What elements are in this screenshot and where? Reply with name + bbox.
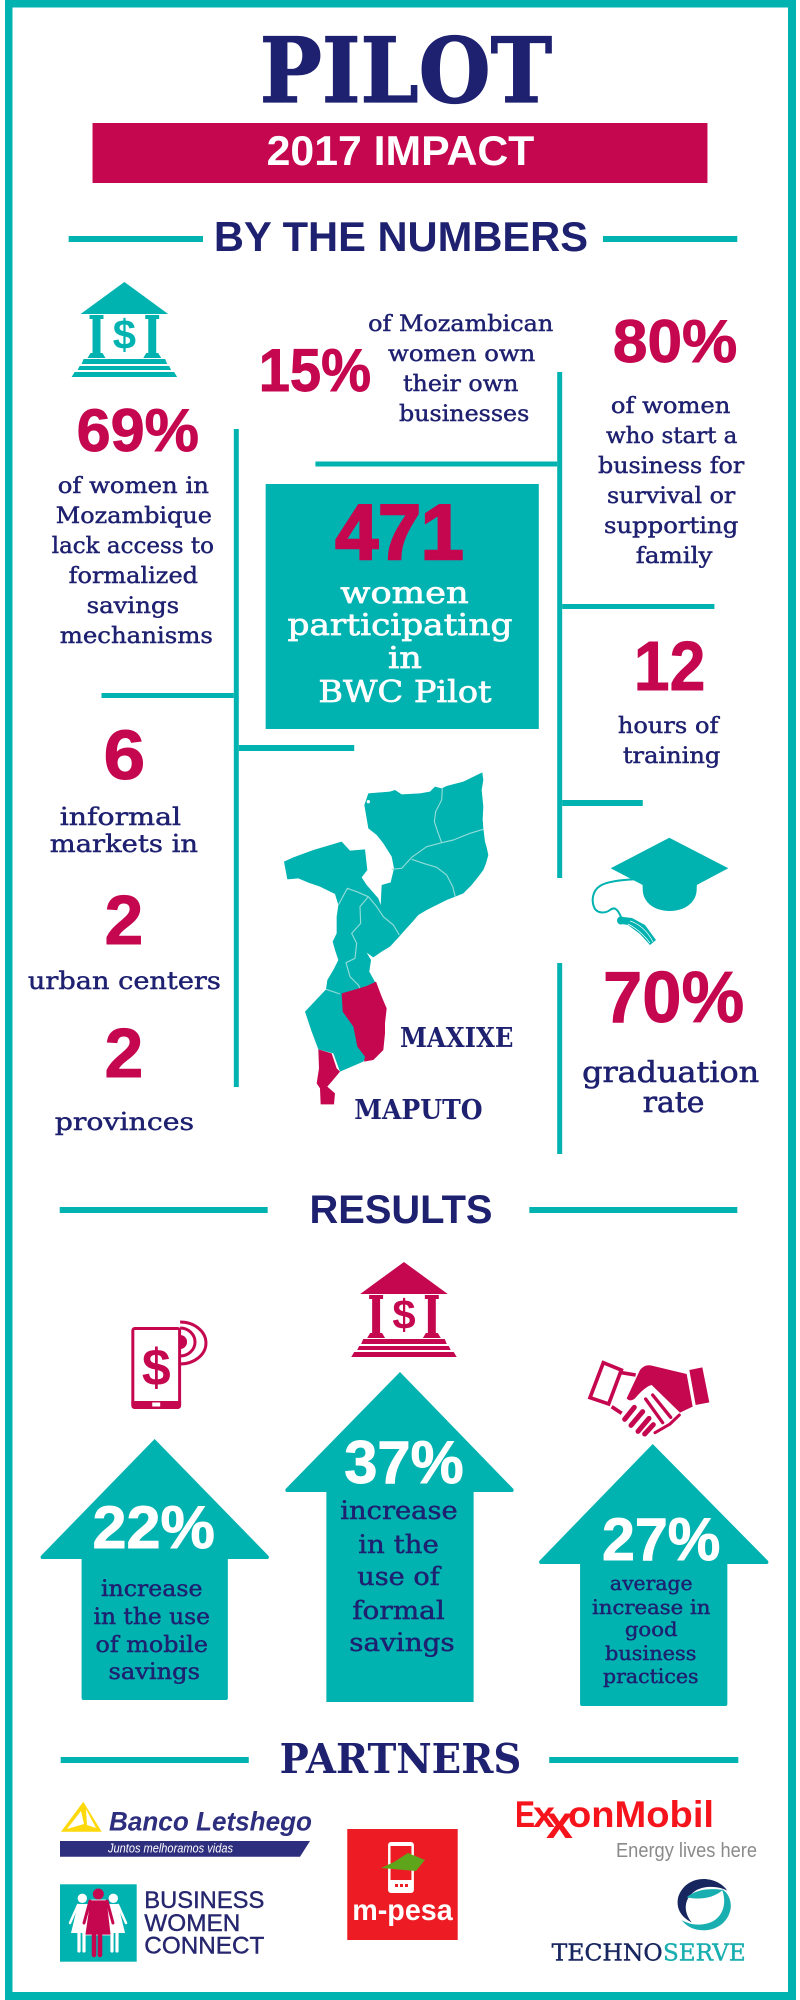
panel: 471 women: women (340, 576, 469, 611)
arrow: 37 percent formal savings: use of (357, 1562, 442, 1591)
icon: teal bank: $ (113, 311, 136, 358)
stat: 15 percent businesses: businesses (399, 402, 529, 427)
arrow: 37 percent formal savings: savings (349, 1628, 455, 1657)
stat: 69 percent savings: formalized (69, 564, 198, 589)
panel: 471 women: participating (288, 608, 512, 643)
logo: Banco Letshego: Juntos melhoramos vidas (107, 1840, 233, 1855)
heading: results: RESULTS (309, 1188, 493, 1232)
stat: markets, urban centers, provinces: 6 (103, 716, 145, 794)
panel: 471 women: 471 (335, 490, 464, 576)
logo: ExxonMobil: x (546, 1796, 573, 1848)
heading: partners (61, 1735, 738, 1783)
stat: 15 percent businesses: their own (403, 372, 518, 397)
stat: 69 percent savings: mechanisms (60, 624, 213, 649)
icon: handshake (590, 1363, 709, 1434)
stat: markets, urban centers, provinces: provinces (55, 1108, 194, 1136)
stat: 69 percent savings: lack access to (52, 534, 214, 559)
stat: 80 percent survival: business for (598, 454, 745, 479)
stat: 69 percent savings (52, 397, 214, 649)
map label: Maputo: MAPUTO (354, 1095, 483, 1126)
title: PILOT (260, 19, 552, 124)
arrow: 37 percent formal savings (285, 1372, 514, 1702)
arrow: 22 percent mobile savings: 22% (93, 1494, 215, 1561)
stat: markets, urban centers, provinces: urban centers (28, 967, 221, 995)
stat: 15 percent businesses: of Mozambican (368, 312, 553, 337)
logo: ExxonMobil: x (533, 1794, 555, 1835)
heading: by the numbers (69, 213, 737, 260)
stat: 70 percent graduation: rate (643, 1085, 704, 1119)
stat: 12 hours (618, 627, 720, 769)
icon: mobile phone: $ (142, 1338, 171, 1396)
icon: crimson bank (351, 1262, 457, 1357)
arrow: 37 percent formal savings: in the (358, 1530, 439, 1559)
arrow: 22 percent mobile savings: in the use (94, 1605, 210, 1630)
map of Mozambique (284, 772, 488, 1104)
stat: 80 percent survival: who start a (606, 424, 737, 449)
arrow: 27 percent business practices: practices (603, 1664, 698, 1688)
stat: 12 hours: training (623, 744, 720, 769)
stat: 12 hours: hours of (618, 714, 720, 739)
panel: 471 women: in (388, 641, 422, 676)
icon: mobile phone (131, 1322, 206, 1409)
logo: Banco Letshego (60, 1802, 312, 1857)
stat: 15 percent businesses (259, 312, 553, 427)
logo: TechnoServe: SERVE (663, 1941, 746, 1967)
logo: TechnoServe: TECHNO (552, 1941, 663, 1967)
stat: 70 percent graduation: graduation (582, 1055, 759, 1089)
panel: 471 women: BWC Pilot (318, 675, 492, 710)
arrow: 27 percent business practices: average (610, 1571, 693, 1595)
stat: 80 percent survival: 80% (613, 308, 737, 375)
arrow: 27 percent business practices (539, 1444, 768, 1706)
stat: markets, urban centers, provinces: 2 (104, 881, 143, 959)
stat: 12 hours: 12 (634, 627, 705, 705)
stat: markets, urban centers, provinces: informal (60, 803, 181, 831)
subtitle banner: 2017 IMPACT (267, 127, 535, 174)
map region: Maputo (317, 1049, 340, 1104)
logo: Banco Letshego: Banco Letshego (109, 1807, 312, 1837)
logo: ExxonMobil: onMobil (568, 1794, 714, 1835)
arrow: 22 percent mobile savings: of mobile (96, 1633, 208, 1658)
subtitle banner (93, 123, 707, 183)
arrow: 22 percent mobile savings (41, 1439, 269, 1700)
stat: markets, urban centers, provinces (28, 716, 221, 1136)
logo: Business Women Connect: CONNECT (144, 1932, 265, 1959)
arrow: 27 percent business practices: good (625, 1617, 678, 1641)
stat: 69 percent savings: of women in (58, 474, 209, 499)
stat: markets, urban centers, provinces: 2 (104, 1014, 143, 1092)
stat: 80 percent survival: of women (611, 394, 730, 419)
logo: m-pesa (347, 1829, 458, 1940)
arrow: 37 percent formal savings: increase (340, 1496, 458, 1525)
connector lines (101, 372, 714, 1154)
stat: 69 percent savings: Mozambique (56, 504, 212, 529)
logo: ExxonMobil: Energy lives here (616, 1840, 757, 1862)
icon: graduation cap (593, 838, 728, 945)
stat: 80 percent survival: supporting (604, 514, 738, 539)
logo: Business Women Connect (60, 1884, 265, 1962)
logo: Business Women Connect: WOMEN (144, 1910, 240, 1937)
map region: Maxixe (342, 982, 387, 1062)
stat: 69 percent savings: savings (87, 594, 179, 619)
panel: 471 women (266, 484, 539, 729)
arrow: 37 percent formal savings: 37% (344, 1429, 464, 1496)
logo: TechnoServe (552, 1879, 746, 1967)
arrow: 37 percent formal savings: formal (352, 1596, 445, 1625)
stat: 80 percent survival (598, 308, 745, 569)
stat: markets, urban centers, provinces: markets in (50, 830, 198, 858)
stat: 69 percent savings: 69% (77, 397, 199, 464)
stat: 80 percent survival: family (636, 544, 713, 569)
arrow: 22 percent mobile savings: increase (101, 1577, 202, 1602)
arrow: 22 percent mobile savings: savings (108, 1660, 200, 1685)
stat: 15 percent businesses: women own (388, 342, 535, 367)
logo: ExxonMobil: E (515, 1794, 535, 1835)
map label: Maxixe: MAXIXE (400, 1023, 513, 1054)
logo: Business Women Connect: BUSINESS (144, 1887, 264, 1914)
icon: teal bank (72, 282, 177, 377)
stat: 15 percent businesses: 15% (259, 337, 371, 404)
arrow: 27 percent business practices: increase in (592, 1595, 711, 1619)
heading: partners: PARTNERS (280, 1735, 521, 1783)
icon: crimson bank: $ (392, 1291, 416, 1338)
stat: 70 percent graduation (582, 958, 759, 1119)
logo: m-pesa: m-pesa (352, 1894, 453, 1927)
arrow: 27 percent business practices: business (605, 1641, 696, 1665)
stat: 70 percent graduation: 70% (603, 958, 744, 1038)
stat: 80 percent survival: survival or (607, 484, 736, 509)
arrow: 27 percent business practices: 27% (602, 1506, 720, 1573)
heading: by the numbers: BY THE NUMBERS (214, 213, 588, 260)
logo: ExxonMobil (515, 1794, 757, 1862)
heading: results (60, 1188, 737, 1232)
